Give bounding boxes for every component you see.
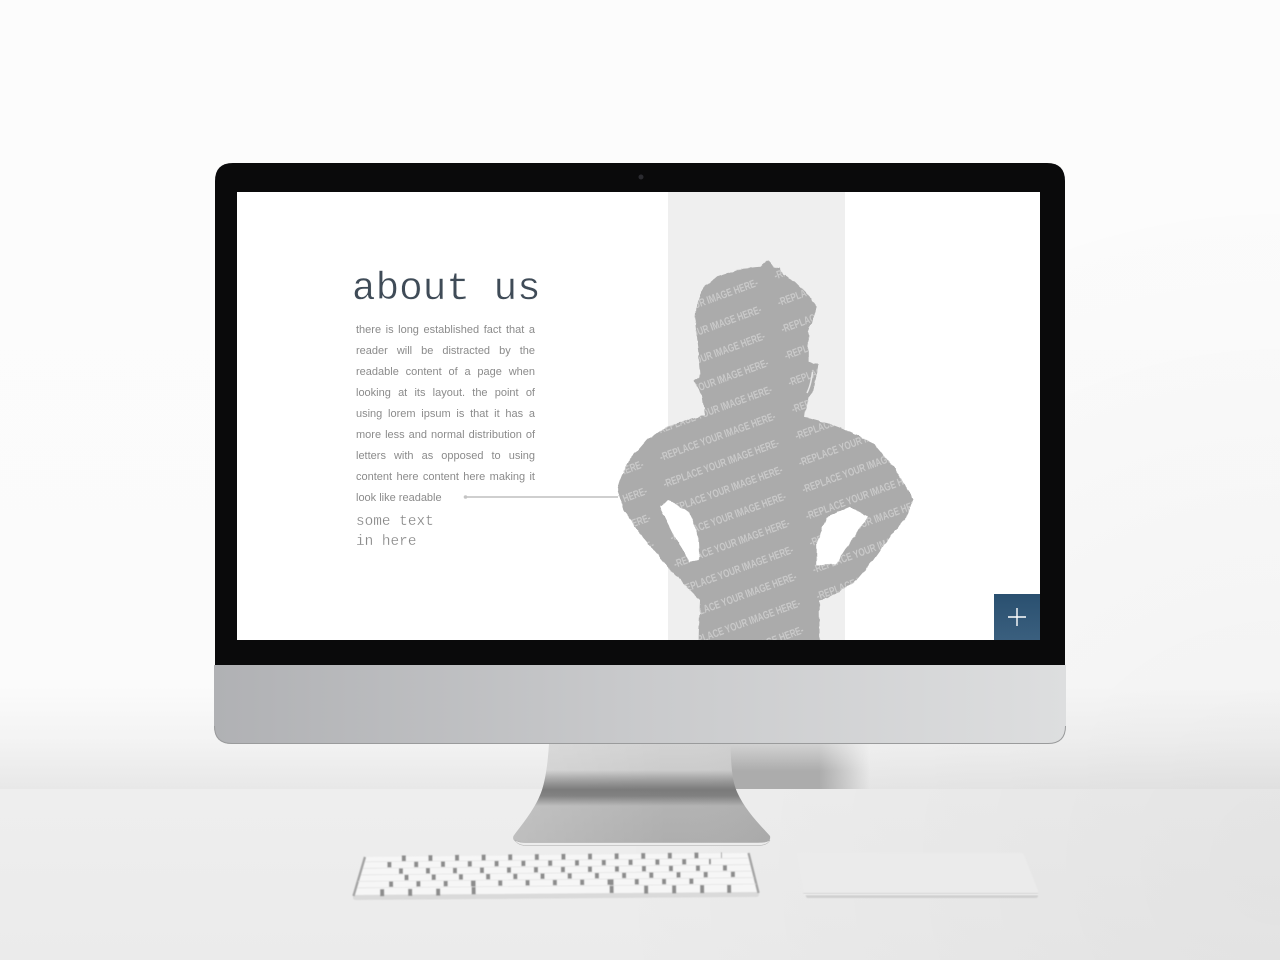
replace image watermark [622,270,913,640]
shadow top fade [725,744,870,789]
glasses arm [807,372,812,393]
key gaps [382,855,738,896]
trackpad edge [803,893,1038,898]
body paragraph: there is long established fact that a [356,324,535,336]
screen [237,192,1040,640]
plus button [994,594,1040,640]
monitor stand [513,744,770,846]
keyboard side edges [354,853,758,896]
monitor chin [214,665,1066,744]
monitor bezel [215,163,1065,665]
stand base lip [515,840,770,846]
body paragraph [356,324,536,504]
body paragraph: readable content of a page when [356,366,535,378]
right arm gap [817,507,868,565]
body paragraph: looking at its layout. the point of [356,387,535,399]
plus icon [1008,608,1026,626]
keyboard bottom edge [353,892,759,900]
trackpad [797,853,1038,898]
body paragraph: more less and normal distribution of [356,429,535,441]
body paragraph: using lorem ipsum is that it has a [356,408,535,420]
person silhouette placeholder [618,260,914,640]
subheading: some text [356,514,434,530]
body paragraph: reader will be distracted by the [356,345,535,357]
keyboard body [353,853,759,900]
body paragraph: content here content here making it [356,471,535,483]
stand shadow band [536,772,744,804]
desk surface [0,789,1280,960]
left arm gap [660,500,699,562]
body paragraph: look like readable [356,492,442,504]
monitor shadow on wall [725,744,870,789]
title: about us [352,266,541,311]
keyboard [353,853,759,900]
subheading [356,514,434,550]
webcam [638,174,644,180]
stand side shading [513,744,770,843]
monitor body [214,163,1066,744]
connector line [464,495,618,499]
chin bottom edge [214,726,1066,744]
image column [668,192,845,640]
trackpad highlight [804,894,1038,896]
key row lines [357,858,756,888]
subheading: in here [356,534,416,550]
silhouette fill [617,261,913,655]
trackpad surface [797,853,1038,894]
body paragraph: letters with as opposed to using [356,450,535,462]
